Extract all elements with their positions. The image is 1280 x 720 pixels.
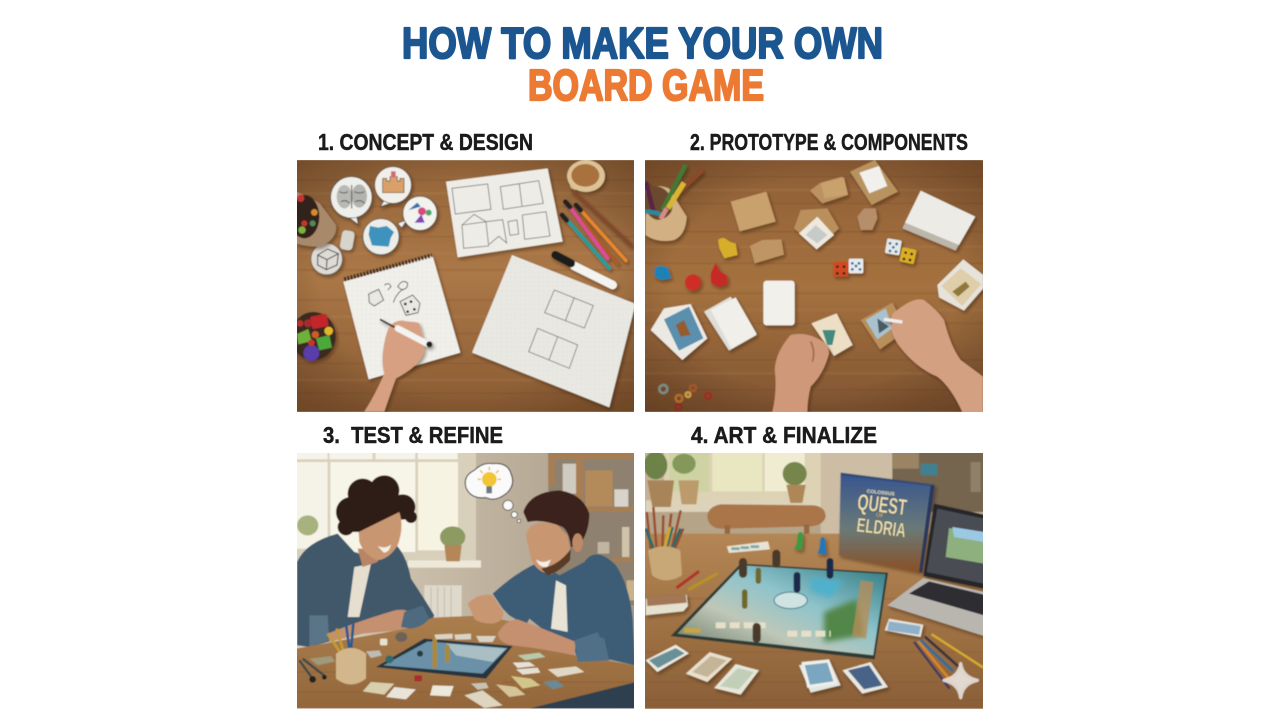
title bbox=[402, 19, 883, 110]
card stack right bbox=[937, 259, 983, 311]
person left bbox=[297, 475, 434, 647]
icon: castle bubble bbox=[375, 167, 411, 207]
right hand bbox=[884, 299, 983, 412]
radiator bbox=[424, 585, 462, 618]
window bbox=[296, 452, 481, 568]
panel: prototype and components photo bbox=[645, 160, 983, 412]
laptop bbox=[887, 504, 984, 636]
loose wooden tokens bbox=[659, 385, 711, 410]
icon: blue creature bubble bbox=[363, 219, 408, 255]
pencil cup bbox=[646, 507, 683, 580]
game board bbox=[671, 564, 888, 659]
room wall bbox=[644, 452, 984, 709]
icon: brain bubble bbox=[331, 177, 372, 225]
paper: board layout sketch bbox=[446, 168, 563, 257]
green and blue pawns bbox=[793, 532, 827, 554]
crayons and paint palette bbox=[676, 541, 770, 590]
illustrated card deck bbox=[651, 304, 707, 360]
jar with beads and small die bbox=[289, 192, 355, 251]
box title text: ELDRIA bbox=[855, 514, 907, 542]
wooden table bbox=[644, 534, 984, 709]
stack of blank cards bbox=[902, 191, 975, 251]
dice bbox=[833, 238, 917, 277]
title line 1: HOW TO MAKE YOUR OWN bbox=[402, 19, 883, 68]
notebook with dice sketches bbox=[343, 255, 460, 379]
cards row bbox=[646, 619, 923, 695]
wooden table bbox=[645, 160, 983, 412]
graph paper with board sketches bbox=[472, 255, 634, 407]
hands on table bbox=[401, 595, 609, 662]
game board bbox=[376, 639, 513, 679]
box title text: QUEST bbox=[856, 488, 908, 520]
pencil cup bbox=[639, 165, 702, 241]
box title text: COLOSSUS bbox=[866, 489, 896, 498]
room wall bbox=[296, 452, 636, 709]
cardboard pieces bbox=[731, 160, 898, 263]
heading: step 2: 2. PROTOTYPE & COMPONENTS bbox=[690, 129, 968, 155]
panel: art and finalize photo bbox=[644, 451, 984, 709]
heading: step 1: 1. CONCEPT & DESIGN bbox=[318, 129, 533, 155]
wooden chair bbox=[707, 504, 826, 535]
shelves bbox=[892, 452, 984, 512]
panel: test and refine photo bbox=[296, 452, 636, 709]
bookshelf bbox=[548, 452, 636, 605]
coloured pens bbox=[555, 191, 631, 285]
heading: step 3: 3. TEST & REFINE bbox=[323, 422, 503, 448]
pen cup with pencils bbox=[299, 624, 422, 684]
potted plant bbox=[440, 526, 465, 561]
stack of cards left bbox=[646, 595, 688, 615]
hand holding pen bbox=[364, 319, 432, 412]
person right bbox=[493, 490, 635, 665]
box title text: OF bbox=[875, 513, 885, 520]
cards on table bbox=[309, 634, 584, 708]
game box Quest of Eldria bbox=[839, 473, 935, 573]
icon: dice sticker bbox=[311, 243, 342, 275]
potted plants bbox=[644, 451, 807, 507]
panel: concept and design photo bbox=[297, 160, 634, 412]
coffee cup bbox=[567, 160, 605, 192]
title line 2: BOARD GAME bbox=[528, 61, 764, 110]
card being crafted bbox=[811, 303, 907, 356]
window bbox=[646, 452, 894, 534]
wooden figure bbox=[857, 208, 877, 230]
heading: step 4: 4. ART & FINALIZE bbox=[691, 422, 877, 448]
bowl of dice bbox=[291, 312, 336, 361]
wooden table bbox=[296, 615, 636, 709]
wooden desk bbox=[297, 160, 634, 412]
thought bubble with lightbulb bbox=[465, 463, 521, 523]
box title text bbox=[855, 488, 908, 542]
sparkle mark bbox=[944, 664, 977, 698]
game pieces on board bbox=[743, 554, 830, 639]
coloured pencils bbox=[915, 635, 982, 688]
left hand bbox=[772, 334, 829, 412]
game pawns bbox=[655, 238, 738, 290]
icon: flower bubble bbox=[403, 196, 437, 230]
blank card piles bbox=[704, 281, 795, 351]
